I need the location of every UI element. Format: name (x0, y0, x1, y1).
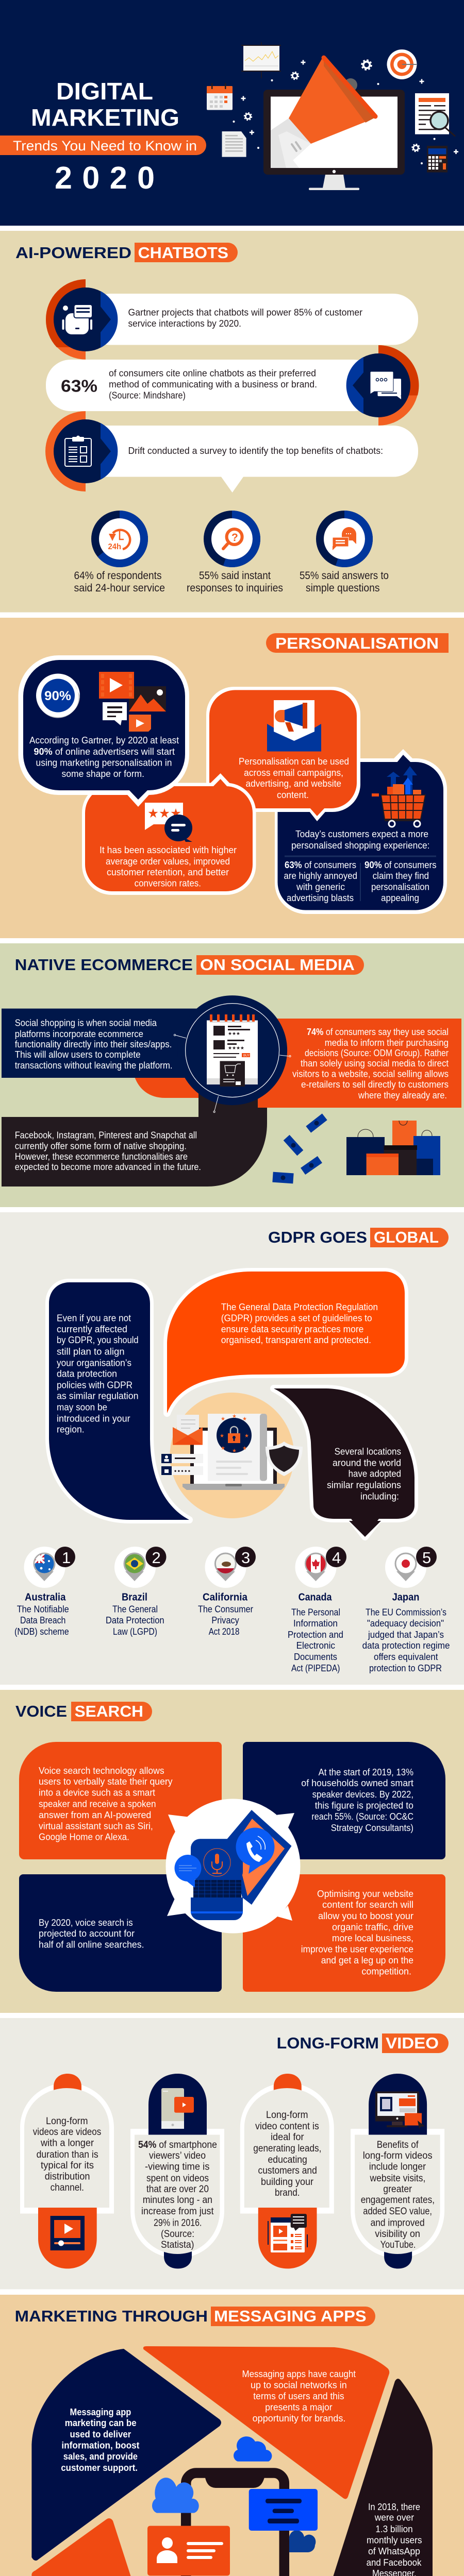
icon: clipboard (65, 436, 91, 466)
row: drift survey (45, 411, 418, 493)
heading (15, 243, 238, 262)
card: 54 percent: Statista) (161, 2240, 194, 2250)
card: benefits: greater (383, 2184, 412, 2195)
item: California: California (203, 1591, 248, 1603)
item: Japan: protection to GDPR (369, 1663, 442, 1673)
callout: shopping experience: personalisation (371, 882, 429, 892)
callout: similar regulations: around the world (333, 1457, 401, 1468)
text block: 74 percent: than solely using social media to direct (301, 1058, 449, 1069)
heading: SEARCH (75, 1702, 143, 1720)
item: Canada (288, 1547, 346, 1673)
card: long-form definition: Long-form (46, 2116, 88, 2127)
card: 54 percent: minutes long - an (143, 2195, 212, 2206)
row: 63 percent: 63% (61, 376, 97, 396)
card: benefits (351, 2074, 444, 2268)
callout: shopping experience: are highly annoyed (284, 870, 357, 881)
callout: shopping experience: with generic (296, 882, 345, 892)
icon: robot (62, 304, 92, 334)
illustration: data protection laptop: ••••• (174, 1467, 190, 1475)
icon: calendar (207, 83, 233, 110)
icon: content media (99, 672, 166, 732)
text block: optimising content: more local business, (332, 1933, 413, 1943)
heading: PERSONALISATION (275, 634, 439, 652)
text block: optimising content: competition. (361, 1966, 411, 1977)
text block: smart speakers: this figure is projected to (315, 1800, 413, 1811)
card: 54 percent (130, 2074, 224, 2268)
text block: native shopping: expected to become more advanced in the future. (15, 1161, 201, 1172)
panel: voice search (0, 1690, 464, 2013)
stat: 64 percent: 64% of respondents (74, 570, 162, 582)
text block: optimising content: allow you to boost your (318, 1910, 413, 1921)
stat: 64 percent: said 24-hour service (74, 582, 165, 594)
item: Australia: (NDB) scheme (14, 1626, 69, 1637)
illustration: data protection laptop: ★ (221, 1446, 225, 1451)
segment: monthly users: and Facebook (367, 2557, 422, 2568)
text block: 74 percent: e-retailers to sell directly to customers (301, 1079, 449, 1090)
callout: shopping experience: appealing (381, 892, 419, 903)
card: content for leads (240, 2074, 334, 2268)
card: 54 percent: spent on videos (146, 2173, 209, 2184)
text block: 74 percent (258, 1019, 461, 1108)
callout: retention benefits: customer retention, and better (107, 867, 229, 877)
stat: 55 percent instant: 55% said instant (199, 570, 271, 582)
segment: monthly users (313, 2379, 433, 2576)
icon: document (222, 131, 246, 157)
illustration: phone with messages (147, 2436, 318, 2576)
callout: similar regulations: have adopted (349, 1468, 401, 1479)
text block: 74 percent: 74% of consumers say they use social (307, 1026, 449, 1037)
segment: monthly users: In 2018, there (368, 2501, 420, 2512)
text block: native shopping: Facebook, Instagram, Pinterest and Snapchat all (15, 1130, 197, 1141)
text block: 74 percent: media to inform their purchasing (325, 1037, 449, 1048)
panel: AI-powered chatbots (0, 231, 464, 612)
icon: target (387, 49, 417, 79)
illustration: data protection laptop: ★ (232, 1448, 237, 1454)
item: Canada: 4 (332, 1549, 341, 1567)
row: drift survey: Drift conducted a survey to identify the top benefits of chatbots: (128, 445, 383, 456)
card: benefits: engagement rates, (361, 2195, 435, 2206)
illustration: data protection laptop: ★ (220, 1433, 224, 1439)
text block: optimising content (243, 1874, 445, 1992)
icon: desktop monitor (375, 2092, 425, 2129)
text block: optimising content: improve the user experience (301, 1943, 413, 1955)
text block: optimising content: content for search will (322, 1899, 413, 1910)
icon: star rating: ★★★ (147, 806, 181, 821)
card: 54 percent: that are over 20 (146, 2184, 209, 2195)
heading: VOICE (15, 1702, 67, 1720)
segment: app marketing uses: marketing can be (65, 2417, 137, 2428)
callout: align with GDPR: your organisation’s (57, 1358, 131, 1368)
card: 54 percent: -viewing time is (145, 2162, 209, 2173)
icon: question magnifier: ? (231, 532, 238, 544)
text block: social shopping: platforms incorporate ecommerce (15, 1028, 143, 1039)
icon: report with magnifier (415, 93, 455, 136)
text block: voice search technology (19, 1742, 222, 1859)
segment: monthly users: of WhatsApp (368, 2546, 420, 2556)
panel: marketing through messaging apps (0, 2295, 464, 2576)
icon: video webpage (268, 2214, 308, 2252)
item: Japan: Japan (392, 1591, 419, 1603)
callout: align with GDPR: region. (57, 1423, 85, 1434)
text block: voice search technology: into a device such as a smart (39, 1787, 155, 1798)
title (0, 78, 206, 195)
segment: app marketing uses: customer support. (61, 2462, 138, 2473)
item: Japan: 5 (422, 1549, 431, 1567)
illustration: megaphone and monitor (263, 57, 405, 190)
text block: 74 percent: visitors to a website, social selling allows (292, 1069, 449, 1079)
callout: align with GDPR: introduced in your (57, 1413, 130, 1423)
icon: chat bubbles (370, 371, 401, 399)
callout: align with GDPR: Even if you are not (57, 1313, 131, 1323)
text block: voice search technology: virtual assistant such as Siri, (39, 1821, 153, 1832)
card: 54 percent: 29% in 2016. (154, 2218, 202, 2229)
heading (15, 1702, 152, 1721)
message card: blue chat (249, 2489, 318, 2531)
card: benefits: YouTube. (380, 2240, 416, 2250)
heading: NATIVE ECOMMERCE (15, 956, 193, 974)
item: Australia (14, 1547, 75, 1637)
segment: app marketing uses (31, 2349, 221, 2561)
segment: monthly users: monthly users (367, 2534, 422, 2545)
item: Brazil: 2 (152, 1549, 161, 1567)
callout: align with GDPR: by GDPR, you should (57, 1334, 139, 1345)
heading: MARKETING THROUGH (15, 2307, 208, 2325)
card: content for leads: educating (268, 2155, 307, 2165)
callout: similar regulations: Several locations (335, 1446, 401, 1457)
icon: phone video (161, 2088, 194, 2129)
item: California: Act 2018 (209, 1626, 239, 1637)
title: DIGITAL (56, 78, 153, 105)
card: long-form definition: typical for its (41, 2160, 94, 2171)
illustration: data protection laptop: ★ (244, 1433, 249, 1439)
text block: smart speakers: At the start of 2019, 13% (319, 1767, 413, 1777)
illustration: data protection laptop: ★ (232, 1414, 237, 1419)
text block: native shopping (2, 1092, 267, 1187)
text block: smart speakers: speaker devices. By 2022, (312, 1789, 413, 1800)
item: California (198, 1547, 256, 1637)
callout: align with GDPR (49, 1282, 189, 1520)
icon: shopping bags (346, 1121, 440, 1175)
card: benefits: and improved (371, 2218, 425, 2229)
segment: monthly users: 1.3 billion (375, 2523, 413, 2534)
item: Canada: Electronic (296, 1640, 335, 1651)
heading: AI-POWERED (15, 244, 131, 262)
text block: optimising content: and get a leg up on the (321, 1955, 413, 1965)
text block: voice search technology: answer from an AI-powered (39, 1809, 151, 1820)
card: content for leads: building your (261, 2177, 314, 2188)
callout: similar regulations (274, 1388, 415, 1537)
text block: smart speakers (243, 1742, 445, 1859)
callout: shopping experience (275, 749, 447, 914)
stat: 55 percent answers (300, 514, 389, 594)
callout: retention benefits: average order values, improved (106, 856, 230, 867)
item: California: 3 (241, 1549, 250, 1567)
callout: GDPR definition: ensure data security practices more (221, 1324, 363, 1334)
callout: align with GDPR: still plan to align (57, 1346, 125, 1357)
icon: 90 percent badge: 90% (44, 689, 71, 703)
text block: smart speakers: reach 55%. (Source: OC&C (311, 1811, 413, 1822)
heading: GLOBAL (374, 1228, 439, 1246)
row: 85 percent: service interactions by 2020. (128, 318, 241, 329)
icon: shopping cart (372, 766, 425, 827)
callout: personalisation channels (206, 687, 360, 821)
icon: smart speaker bubble (166, 1799, 300, 1933)
callout: align with GDPR: policies with GDPR (57, 1379, 132, 1390)
card: benefits: Benefits of (377, 2140, 419, 2150)
icon: 24 hour clock: 24h (108, 543, 121, 551)
text block: smart speakers: Strategy Consultants) (331, 1822, 413, 1833)
card: benefits: include longer (369, 2162, 426, 2173)
item: Canada: Act (PIPEDA) (291, 1663, 340, 1673)
heading (277, 2033, 449, 2053)
row: 85 percent: Gartner projects that chatbots will power 85% of customer (128, 307, 362, 317)
callout: shopping experience: 90% of consumers (364, 859, 437, 870)
heading: MESSAGING APPS (214, 2307, 367, 2325)
item: Japan: The EU Commission’s (366, 1607, 446, 1618)
text block: optimising content: Optimising your website (317, 1888, 413, 1899)
callout: align with GDPR: currently affected (57, 1324, 127, 1334)
title: 2020 (55, 160, 155, 195)
card: long-form definition: channel. (51, 2182, 84, 2193)
callout: GDPR definition: (GDPR) provides a set of guidelines to (221, 1313, 372, 1323)
card: benefits: website visits, (370, 2173, 425, 2184)
callout: align with GDPR: as similar regulation (57, 1390, 139, 1401)
text block: smart speakers: of households owned smart (301, 1777, 413, 1788)
icon: answer bubbles (333, 527, 356, 550)
illustration: data protection laptop: ★ (242, 1416, 247, 1422)
card: benefits: visibility on (375, 2229, 420, 2240)
icon: question magnifier (223, 529, 242, 549)
segment: caught up to social networks: up to social networks in (251, 2380, 347, 2391)
card: content for leads: ideal for (271, 2132, 304, 2143)
icon: star rating (145, 803, 192, 842)
item: California: Privacy (211, 1615, 239, 1625)
title: MARKETING (31, 104, 179, 131)
text block: half of searches: projected to account for (39, 1928, 135, 1939)
item: Brazil: Data Protection (106, 1615, 164, 1625)
callout: retention benefits (82, 773, 256, 895)
item: Canada: Documents (294, 1651, 337, 1662)
segment: app marketing uses: sales, and provide (63, 2451, 138, 2462)
item: Brazil: Law (LGPD) (113, 1626, 157, 1637)
card: content for leads: customers and (258, 2165, 317, 2176)
text block: social shopping: transactions without leaving the platform. (15, 1060, 173, 1071)
segment: caught up to social networks: terms of users and this (253, 2391, 344, 2401)
card: benefits: long-form videos (363, 2150, 433, 2161)
icon: 24 hour clock (108, 530, 130, 551)
callout: align with GDPR: data protection (57, 1368, 117, 1379)
item: Brazil: The General (112, 1604, 158, 1615)
heading: CHATBOTS (138, 244, 228, 262)
card: long-form definition: videos are videos (33, 2127, 101, 2138)
heading: ON SOCIAL MEDIA (200, 956, 355, 974)
stat: 55 percent instant (187, 514, 283, 594)
heading (15, 2307, 375, 2326)
row: 63 percent: method of communicating with a business or brand. (109, 379, 317, 389)
card: long-form definition: with a longer (40, 2138, 94, 2149)
text block: optimising content: organic traffic, drive (332, 1922, 413, 1933)
stat: 55 percent answers: 55% said answers to (300, 570, 389, 582)
text block: native shopping: However, these ecommerce functionalities are (15, 1151, 188, 1162)
callout: shopping experience: advertising blasts (287, 892, 354, 903)
connector shape: orange under (135, 1077, 201, 1098)
panel: personalisation (0, 618, 464, 938)
segment: 50 percent (31, 2518, 185, 2576)
callout: GDPR definition: The General Data Protection Regulation (221, 1301, 378, 1312)
panel: long-form video (0, 2018, 464, 2290)
item: Japan (362, 1547, 450, 1673)
segment: monthly users: were over (374, 2512, 414, 2522)
icon: shopping app circle: BUY (243, 1054, 250, 1057)
stat: 64 percent (74, 514, 165, 594)
text block: half of searches (19, 1874, 222, 1992)
row: 63 percent (46, 345, 419, 426)
icon: video player (51, 2216, 85, 2250)
row: 63 percent: of consumers cite online chatbots as their preferred (109, 368, 316, 379)
item: Japan: "adequacy decision" (367, 1618, 444, 1629)
callout: personalisation channels: Personalisation can be used (239, 756, 349, 767)
text block: voice search technology: Google Home or Alexa. (39, 1832, 129, 1842)
callout: GDPR definition (167, 1272, 405, 1413)
card: benefits: added SEO value, (363, 2206, 432, 2217)
card: content for leads: video content is (255, 2121, 319, 2132)
callout: 90 percent advertisers: using marketing personalisation in (36, 757, 172, 768)
card: long-form definition: duration than is (37, 2149, 98, 2160)
text block: voice search technology: users to verbally state their query (39, 1776, 173, 1787)
heading (268, 1228, 449, 1247)
item: Canada: The Personal (291, 1607, 340, 1618)
item: Japan: offers equivalent (374, 1651, 438, 1662)
callout: personalisation channels: content. (277, 789, 309, 800)
icon: email megaphone (267, 700, 321, 751)
segment: caught up to social networks (143, 2346, 389, 2499)
callout: 90 percent advertisers: some shape or form. (62, 768, 144, 779)
item: Australia: Data Breach (20, 1615, 65, 1625)
background circle (170, 1393, 294, 1518)
item: Brazil: Brazil (122, 1591, 147, 1603)
text block: half of searches: By 2020, voice search is (39, 1917, 133, 1928)
item: Australia: The Notifiable (17, 1604, 69, 1615)
segment: app marketing uses: information, boost (61, 2439, 139, 2450)
callout: shopping experience: Today’s customers expect a more (295, 828, 428, 839)
text block: voice search technology: Voice search technology allows (39, 1765, 164, 1776)
icon: presentation board (241, 42, 281, 78)
icon: shopping app circle: ★★★ (228, 1031, 240, 1036)
stat: 55 percent instant: responses to inquiries (187, 582, 283, 594)
callout: retention benefits: It has been associated with higher (100, 844, 237, 855)
callout: similar regulations: including: (360, 1491, 399, 1502)
item: Canada: Canada (299, 1591, 332, 1603)
callout: personalisation channels: advertising, and website (245, 778, 341, 789)
text block: voice search technology: speaker and receive a spoken (39, 1798, 156, 1809)
callout: GDPR definition: organised, transparent and protected. (221, 1334, 371, 1345)
item: Japan: data protection regime (362, 1640, 450, 1651)
heading: LONG-FORM (277, 2034, 379, 2052)
stat: 55 percent answers: simple questions (306, 582, 379, 594)
segment: caught up to social networks: opportunity for brands. (253, 2413, 345, 2424)
callout: 90 percent advertisers: 90% of online advertisers will start (34, 746, 175, 757)
panel: header (0, 0, 464, 226)
card: 54 percent: (Source: (161, 2229, 194, 2240)
item: Brazil (106, 1547, 166, 1637)
icon: flying money (272, 1113, 327, 1183)
illustration: data protection laptop (161, 1414, 303, 1490)
icon: gears plus and dots (233, 60, 458, 164)
segment: caught up to social networks: presents a major (265, 2402, 333, 2412)
callout: shopping experience: 63% of consumers (285, 859, 356, 870)
title: Trends You Need to Know in (13, 138, 197, 154)
panel: native ecommerce on social media (0, 943, 464, 1207)
card: content for leads: Long-form (266, 2110, 308, 2121)
callout: personalisation channels: across email campaigns, (244, 767, 343, 778)
illustration: data protection laptop: ★ (221, 1416, 225, 1422)
heading (15, 955, 364, 975)
card: long-form definition: distribution (45, 2172, 90, 2182)
callout: shopping experience: claim they find (373, 870, 429, 881)
text block: half of searches: half of all online searches. (39, 1939, 144, 1950)
item: Australia: Australia (25, 1591, 66, 1603)
callout: shopping experience: personalised shopping experience: (291, 840, 430, 851)
segment: caught up to social networks: Messaging apps have caught (242, 2368, 356, 2379)
text block: social shopping (2, 1009, 208, 1078)
card: content for leads: generating leads, (253, 2143, 321, 2154)
callout: similar regulations: similar regulations (327, 1480, 401, 1490)
callout: 90 percent advertisers (19, 655, 189, 807)
text block: 74 percent: where they already are. (358, 1090, 447, 1100)
item: California: The Consumer (198, 1604, 253, 1615)
icon: shopping app circle (174, 995, 291, 1113)
text block: social shopping: functionality directly into their sites/apps. (15, 1039, 172, 1049)
item: Japan: judged that Japan’s (368, 1629, 444, 1640)
message card: profile (147, 2526, 230, 2575)
text block: native shopping: currently offer some form of native shopping. (15, 1141, 187, 1151)
icon: 90 percent badge (36, 674, 80, 718)
heading: VIDEO (386, 2034, 439, 2052)
item: Australia: 1 (62, 1549, 71, 1567)
callout: align with GDPR: may soon be (57, 1402, 107, 1413)
segment: app marketing uses: Messaging app (70, 2406, 131, 2417)
text block: social shopping: This will allow users to complete (15, 1049, 141, 1060)
segment: app marketing uses: used to deliver (70, 2429, 131, 2439)
callout: retention benefits: conversion rates. (135, 878, 201, 889)
card: long-form definition (20, 2074, 114, 2268)
panel: GDPR goes global (0, 1212, 464, 1685)
card: content for leads: brand. (275, 2188, 300, 2198)
row: 85 percent (46, 279, 418, 360)
item: Canada: Information (293, 1618, 338, 1629)
heading: GDPR GOES (268, 1228, 367, 1246)
icon: shopping app circle: ★★★★ (228, 1045, 244, 1050)
card: 54 percent: viewers’ video (149, 2150, 206, 2161)
callout: 90 percent advertisers: According to Gartner, by 2020 at least (29, 735, 179, 745)
card: 54 percent: 54% of smartphone (138, 2140, 217, 2150)
icon: calculator (427, 146, 448, 172)
row: 63 percent: (Source: Mindshare) (109, 389, 186, 400)
illustration: data protection laptop: ★ (242, 1446, 247, 1451)
text block: social shopping: Social shopping is when social media (15, 1017, 157, 1028)
card: 54 percent: increase from just (141, 2206, 214, 2217)
item: Canada: Protection and (288, 1629, 343, 1640)
